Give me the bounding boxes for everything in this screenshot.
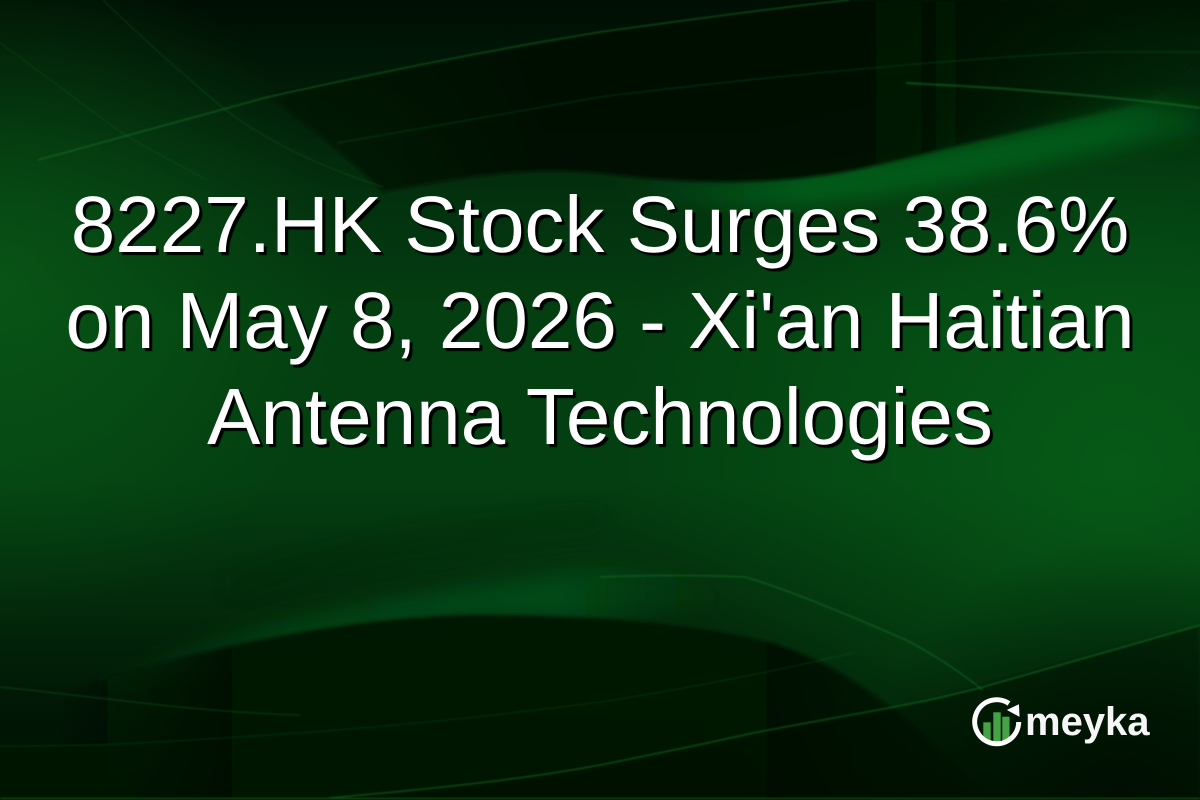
title xyxy=(65,180,1135,464)
icon: circular arrow with bars xyxy=(972,697,1022,746)
wordmark: meyka xyxy=(1025,700,1150,744)
title: on May 8, 2026 - Xi'an Haitian xyxy=(65,276,1135,365)
title: Antenna Technologies xyxy=(207,372,993,461)
logo: meyka xyxy=(972,697,1150,746)
title: 8227.HK Stock Surges 38.6% xyxy=(71,180,1129,269)
